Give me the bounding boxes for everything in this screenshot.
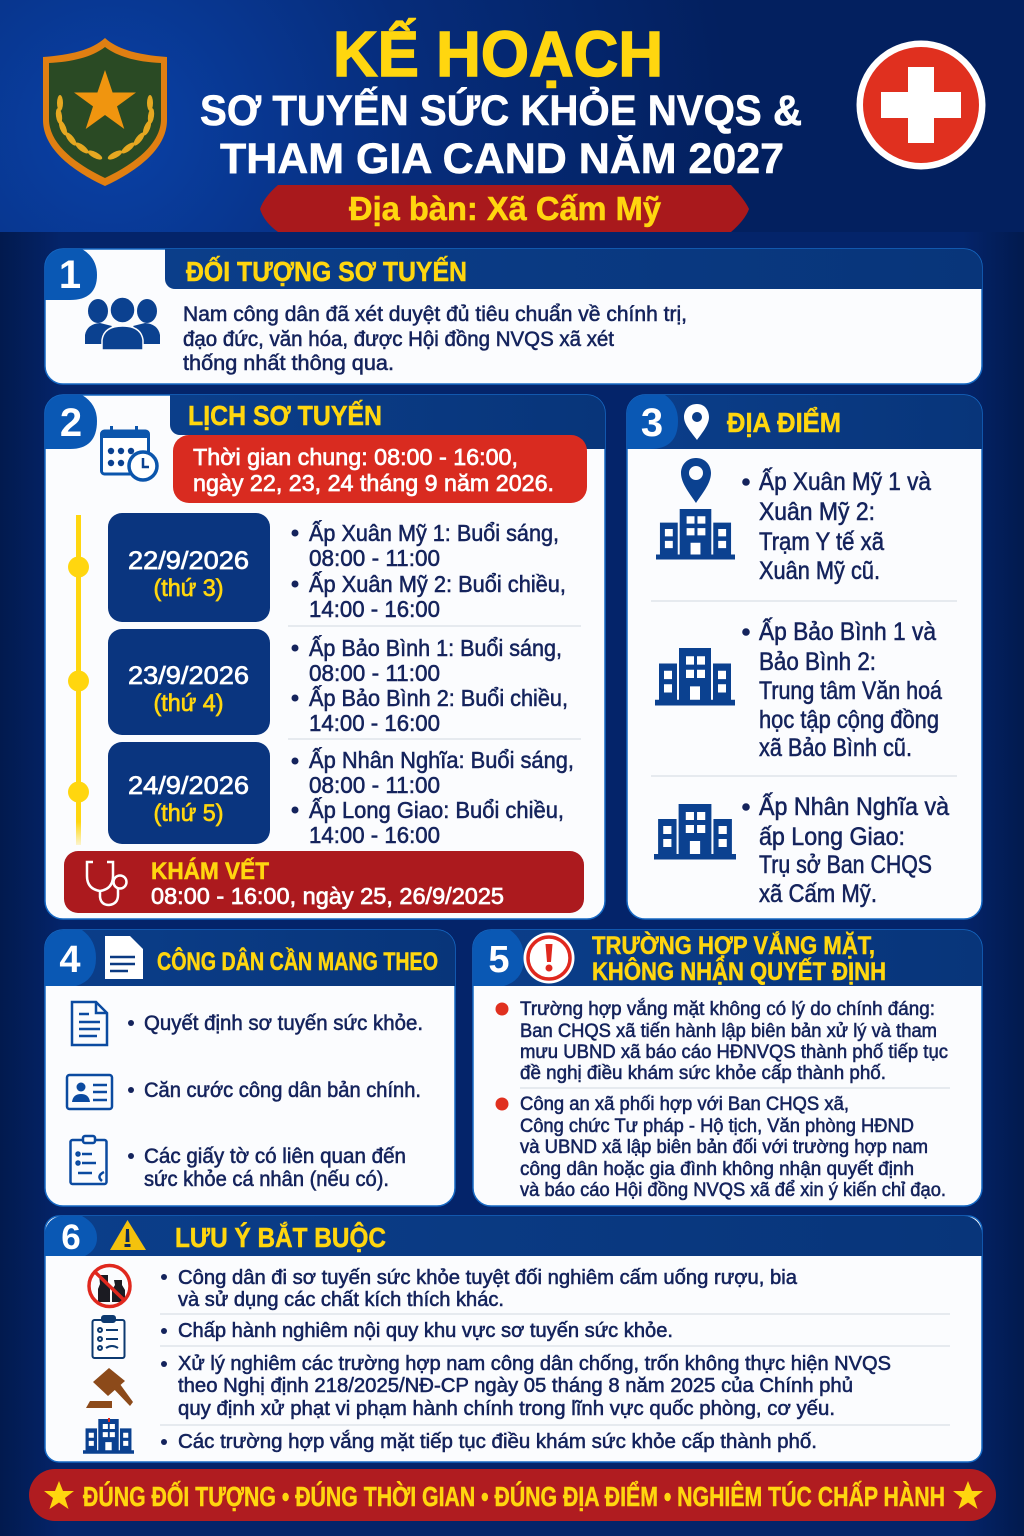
icon: red cross <box>856 40 986 170</box>
icon: building 1 <box>656 509 735 560</box>
item: documents <box>128 1145 406 1191</box>
callout: common time <box>173 435 587 503</box>
note 3: Xử lý nghiêm các trường hợp nam công dân chống, trốn không thực hiện NVQS <box>178 1353 891 1375</box>
location banner <box>260 185 749 232</box>
timeline <box>68 515 89 845</box>
location 1: Xuân Mỹ 2: <box>759 498 875 526</box>
icon: building 2 <box>655 648 735 705</box>
number badge 4 <box>45 930 96 986</box>
icon: exclamation <box>524 932 574 984</box>
icon: white document <box>105 936 143 979</box>
callout: khám vết: 08:00 - 16:00, ngày 25, 26/9/2025 <box>151 883 504 909</box>
panel 1: đối tượng <box>45 249 982 384</box>
footer banner <box>29 1469 996 1521</box>
number badge 2: 2 <box>60 401 82 445</box>
date card 22/9 <box>108 513 270 622</box>
panel 5: vắng mặt <box>473 930 982 1206</box>
location 2: Trung tâm Văn hoá <box>759 677 942 705</box>
callout: common time: ngày 22, 23, 24 tháng 9 năm 2026. <box>193 470 554 496</box>
schedule 23/9: Ấp Bảo Bình 1: Buổi sáng, <box>309 634 562 661</box>
icon: calendar clock <box>101 426 157 480</box>
panel 3: địa điểm <box>627 395 982 919</box>
schedule 22/9 <box>292 519 566 622</box>
date card 24/9 <box>108 742 270 844</box>
date card 23/9: (thứ 4) <box>154 690 224 717</box>
icon: left star <box>44 1481 74 1509</box>
panel 4: công dân cần mang theo <box>45 930 455 1206</box>
number badge 3 <box>627 395 678 449</box>
schedule 22/9: Ấp Xuân Mỹ 2: Buổi chiều, <box>309 570 566 597</box>
header band <box>0 0 1024 232</box>
number badge 6 <box>45 1216 97 1257</box>
schedule 23/9: 14:00 - 16:00 <box>309 710 440 736</box>
text block: refusal: Công an xã phối hợp với Ban CHQS xã, <box>520 1093 849 1115</box>
heading 5: KHÔNG NHẬN QUYẾT ĐỊNH <box>592 956 886 986</box>
text block: absence: Ban CHQS xã tiến hành lập biên bản xử lý và tham <box>520 1020 937 1042</box>
schedule 22/9: 14:00 - 16:00 <box>309 596 440 622</box>
note 1 <box>161 1267 798 1311</box>
date card 23/9: 23/9/2026 <box>128 662 249 690</box>
date card 23/9 <box>108 629 270 735</box>
icon: stethoscope <box>87 862 126 905</box>
icon: hospital <box>83 1418 134 1454</box>
icon: document <box>72 1002 107 1045</box>
text block: absence <box>496 997 948 1084</box>
date card 22/9: (thứ 3) <box>154 575 224 602</box>
heading 3: ĐỊA ĐIỂM <box>727 407 841 438</box>
panel 6: lưu ý <box>45 1216 982 1462</box>
panel 2: lịch sơ tuyến <box>45 395 605 919</box>
heading 4: CÔNG DÂN CẦN MANG THEO <box>157 946 438 976</box>
location 1: Ấp Xuân Mỹ 1 và <box>759 467 931 496</box>
number badge 6: 6 <box>61 1218 81 1257</box>
icon: no alcohol <box>89 1266 130 1306</box>
body text 1: thống nhất thông qua. <box>183 352 394 375</box>
location 2: xã Bảo Bình cũ. <box>759 734 912 762</box>
text block: absence: mưu UBND xã báo cáo HĐNVQS thành phố tiếp tục <box>520 1041 948 1063</box>
body text 1: Nam công dân đã xét duyệt đủ tiêu chuẩn về chính trị, <box>183 303 687 326</box>
number badge 2 <box>45 395 97 449</box>
location 2: Ấp Bảo Bình 1 và <box>759 617 936 646</box>
icon: warning <box>110 1220 146 1250</box>
schedule 22/9: Ấp Xuân Mỹ 1: Buổi sáng, <box>309 519 559 546</box>
icon: right star <box>953 1481 983 1509</box>
note 4: Các trường hợp vắng mặt tiếp tục điều khám sức khỏe cấp thành phố. <box>178 1430 817 1453</box>
icon: army shield <box>43 38 167 186</box>
text block: refusal: và báo cáo Hội đồng NVQS xã để xin ý kiến chỉ đạo. <box>520 1179 946 1201</box>
note 2: Chấp hành nghiêm nội quy khu vực sơ tuyến sức khỏe. <box>178 1320 673 1342</box>
text block: absence: Trường hợp vắng mặt không có lý do chính đáng: <box>520 997 935 1020</box>
schedule 24/9: 08:00 - 11:00 <box>309 772 440 798</box>
location 1 <box>742 467 931 585</box>
callout: khám vết: KHÁM VẾT <box>151 857 269 885</box>
date card 22/9: 22/9/2026 <box>128 547 249 575</box>
callout: khám vết <box>64 851 584 913</box>
location 3: Ấp Nhân Nghĩa và <box>759 792 949 821</box>
icon: people <box>85 297 160 350</box>
schedule 23/9 <box>292 634 568 736</box>
schedule 22/9: 08:00 - 11:00 <box>309 545 440 571</box>
icon: blue pin <box>681 458 711 503</box>
schedule 23/9: Ấp Bảo Bình 2: Buổi chiều, <box>309 684 568 711</box>
title: THAM GIA CAND NĂM 2027 <box>220 135 784 183</box>
number badge 5 <box>473 930 524 986</box>
item: documents: Các giấy tờ có liên quan đến <box>144 1145 406 1168</box>
icon: gavel <box>86 1368 133 1408</box>
location 1: Trạm Y tế xã <box>759 528 884 556</box>
location 2: học tập cộng đồng <box>759 706 939 734</box>
text block: refusal <box>496 1093 946 1201</box>
icon: building 3 <box>654 804 736 860</box>
location 3 <box>742 792 949 908</box>
number badge 1 <box>45 249 97 300</box>
note 1: Công dân đi sơ tuyến sức khỏe tuyệt đối nghiêm cấm uống rượu, bia <box>178 1267 798 1289</box>
note 1: và sử dụng các chất kích thích khác. <box>178 1289 504 1311</box>
location 1: Xuân Mỹ cũ. <box>759 557 880 585</box>
note 3: theo Nghị định 218/2025/NĐ-CP ngày 05 tháng 8 năm 2025 của Chính phủ <box>178 1375 853 1397</box>
location 2: Bảo Bình 2: <box>759 648 876 676</box>
icon: rules clipboard <box>92 1316 124 1358</box>
icon: id card <box>67 1075 112 1109</box>
note 3 <box>161 1353 891 1420</box>
date card 24/9: (thứ 5) <box>154 800 224 827</box>
schedule 24/9: Ấp Nhân Nghĩa: Buổi sáng, <box>309 746 574 773</box>
text block: absence: đề nghị điều khám sức khỏe cấp thành phố. <box>520 1062 886 1084</box>
location 3: ấp Long Giao: <box>759 823 905 851</box>
schedule 24/9: 14:00 - 16:00 <box>309 822 440 848</box>
heading 5: TRƯỜNG HỢP VẮNG MẶT, <box>592 930 875 960</box>
title: KẾ HOẠCH <box>333 18 663 90</box>
number badge 1: 1 <box>59 253 81 297</box>
item: id: Căn cước công dân bản chính. <box>144 1079 421 1102</box>
title <box>200 18 802 183</box>
icon: white pin <box>684 404 709 440</box>
heading 6: LƯU Ý BẮT BUỘC <box>175 1221 386 1253</box>
date card 24/9: 24/9/2026 <box>128 772 249 800</box>
text block: refusal: công dân hoặc gia đình không nhận quyết định <box>520 1158 914 1180</box>
text block: refusal: và UBND xã lập biên bản đối với trường hợp nam <box>520 1136 928 1158</box>
heading 2: LỊCH SƠ TUYẾN <box>188 400 382 431</box>
body text 1: đạo đức, văn hóa, được Hội đồng NVQS xã xét <box>183 328 614 351</box>
schedule 24/9: Ấp Long Giao: Buổi chiều, <box>309 796 564 823</box>
icon: clipboard <box>70 1136 106 1184</box>
number badge 4: 4 <box>59 939 81 981</box>
schedule 24/9 <box>292 746 574 848</box>
note 3: quy định xử phạt vi phạm hành chính trong lĩnh vực quốc phòng, cơ yếu. <box>178 1398 835 1420</box>
location 2 <box>742 617 942 762</box>
location banner: Địa bàn: Xã Cấm Mỹ <box>349 190 662 227</box>
title: SƠ TUYẾN SỨC KHỎE NVQS & <box>200 86 802 135</box>
number badge 5: 5 <box>488 939 510 981</box>
schedule 23/9: 08:00 - 11:00 <box>309 660 440 686</box>
location 3: Trụ sở Ban CHQS <box>759 851 932 879</box>
heading 1: ĐỐI TƯỢNG SƠ TUYẾN <box>186 255 467 287</box>
item: decision: Quyết định sơ tuyến sức khỏe. <box>144 1012 423 1035</box>
item: documents: sức khỏe cá nhân (nếu có). <box>144 1168 389 1191</box>
number badge 3: 3 <box>641 401 663 445</box>
text block: refusal: Công chức Tư pháp - Hộ tịch, Văn phòng HĐND <box>520 1115 914 1137</box>
callout: common time: Thời gian chung: 08:00 - 16:00, <box>193 444 518 470</box>
body text 1 <box>183 303 687 375</box>
heading 5 <box>592 930 886 986</box>
location 3: xã Cấm Mỹ. <box>759 880 877 908</box>
